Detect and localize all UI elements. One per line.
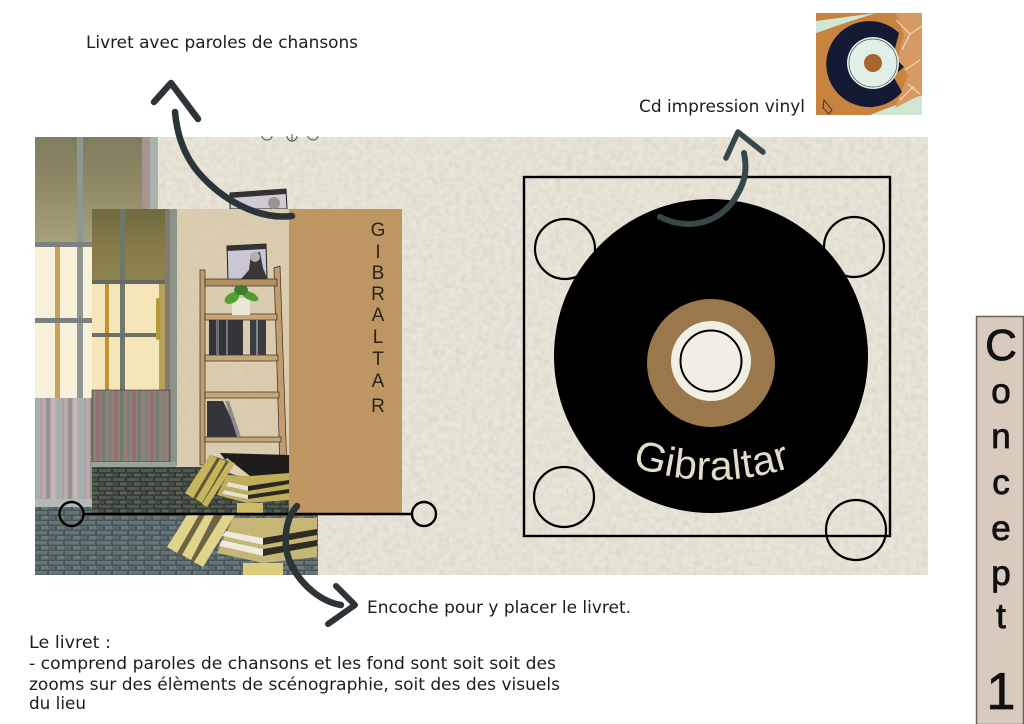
- vertical title: B: [372, 263, 384, 284]
- label: notch: Encoche pour y placer le livret.: [367, 598, 631, 617]
- vertical title: A: [372, 305, 385, 326]
- window upper glass: [35, 137, 145, 245]
- panel: Concept 1 sidebar: C: [985, 321, 1017, 370]
- arrow: to booklet label: [154, 83, 292, 217]
- panel: Concept 1 sidebar: c: [992, 463, 1010, 502]
- lower crates: [167, 515, 317, 575]
- vertical title: R: [371, 284, 385, 305]
- icon: corner circles: [534, 217, 886, 560]
- vertical title: L: [373, 327, 383, 348]
- vertical title: [371, 220, 385, 417]
- cobblestones: [35, 507, 318, 575]
- panel: Concept 1 sidebar: n: [991, 417, 1011, 456]
- floor: [92, 467, 289, 514]
- panel: Concept 1 sidebar: 1: [987, 663, 1015, 721]
- label: booklet: Livret avec paroles de chansons: [86, 33, 358, 52]
- vertical title: I: [375, 242, 381, 263]
- notch line with end circles: [60, 502, 436, 526]
- vertical title: R: [371, 396, 385, 417]
- arrow: to CD label: [660, 132, 763, 224]
- panel: Concept 1 sidebar: p: [991, 554, 1011, 593]
- label: CD: Cd impression vinyl: [639, 97, 805, 116]
- vertical title: T: [372, 349, 384, 370]
- wooden lower panel: [35, 398, 92, 499]
- illustration: large background scene: [35, 137, 318, 575]
- wall: [177, 209, 289, 471]
- text block: booklet description: du lieu: [29, 694, 86, 713]
- vertical title: G: [371, 220, 385, 241]
- panel: Concept 1 sidebar: o: [991, 372, 1011, 411]
- arrow: to notch label: [286, 506, 355, 624]
- text block: booklet description: - comprend paroles de chansons et les fond sont soit soit des: [29, 654, 556, 673]
- panel: booklet cover with vertical title: [289, 209, 402, 514]
- panel: CD sleeve: [522, 176, 892, 562]
- vertical title: A: [372, 371, 385, 392]
- panel: paper background: [35, 134, 928, 575]
- vinyl title: [632, 466, 795, 480]
- bookshelf: [200, 266, 287, 470]
- panel: Concept 1 sidebar: e: [991, 509, 1011, 548]
- text block: booklet description: Le livret :: [29, 633, 111, 652]
- icon: album on shelf: [227, 244, 267, 280]
- illustration: inner booklet scene: [92, 209, 289, 514]
- vinyl record: Gibraltar: [636, 442, 786, 480]
- panel: Concept 1 sidebar: t: [996, 597, 1006, 636]
- peeking album: [230, 189, 287, 209]
- image: CD vinyl thumbnail: [816, 13, 922, 115]
- text block: booklet description: zooms sur des élèments de scénographie, soit des des visuels: [29, 675, 560, 694]
- icon: potted plant: [223, 285, 260, 315]
- stacked crate: [185, 453, 289, 514]
- vinyl record: [554, 199, 868, 513]
- text block: booklet description: [29, 633, 560, 713]
- panel: Concept 1 sidebar: [976, 316, 1024, 724]
